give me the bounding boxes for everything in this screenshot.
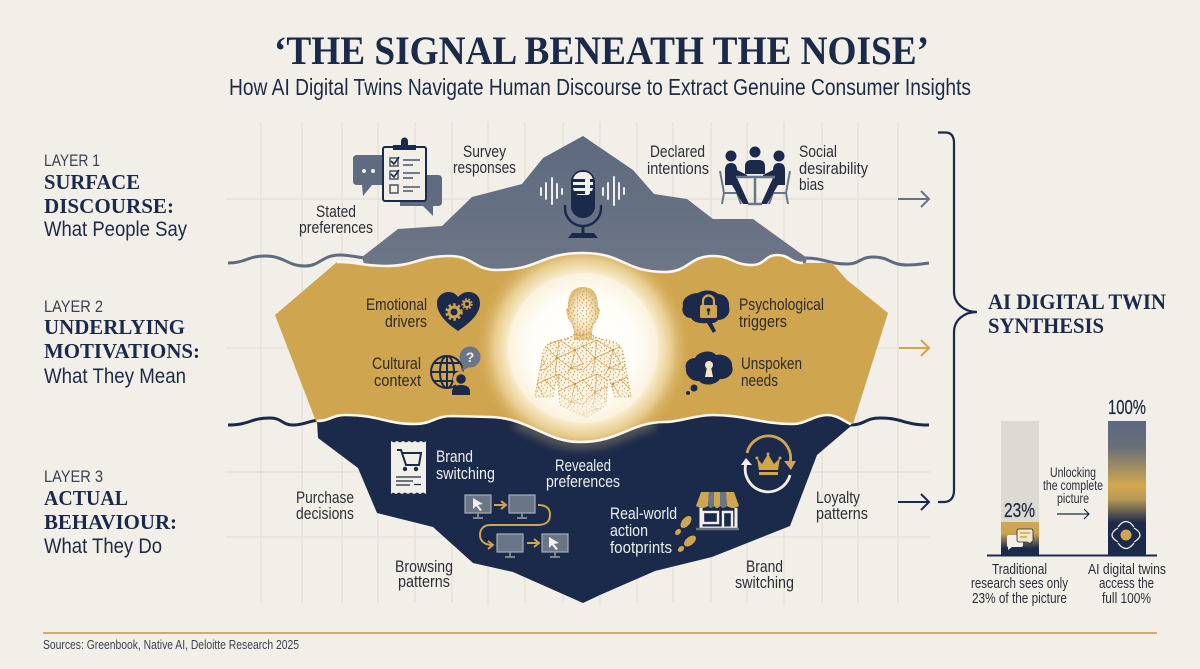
icon: thought cloud with keyhole xyxy=(686,351,733,395)
synthesis heading: AI DIGITAL TWIN xyxy=(988,289,1166,314)
motivation labels: Emotional xyxy=(366,296,427,314)
motivation labels: needs xyxy=(741,372,778,390)
layer 3 heading: BEHAVIOUR: xyxy=(44,510,177,534)
layer 3 heading xyxy=(44,467,177,558)
icon: microphone with sound waves xyxy=(541,170,624,238)
surface labels: Declared xyxy=(650,143,705,161)
icon: globe with person and question xyxy=(431,346,480,395)
motivation labels: Psychological xyxy=(739,296,824,314)
behaviour labels outside: Purchase xyxy=(296,489,354,507)
behaviour labels on navy: action xyxy=(610,522,648,540)
bar chart: traditional vs AI twins: 100% xyxy=(1108,397,1146,419)
caption: AI digital twins: access the xyxy=(1099,576,1154,592)
layer 2 heading xyxy=(44,297,200,388)
caption: AI digital twins: full 100% xyxy=(1102,591,1151,607)
surface labels: preferences xyxy=(299,219,373,237)
caption: AI digital twins: AI digital twins xyxy=(1088,562,1166,578)
behaviour labels on navy: Brand xyxy=(436,448,473,466)
icon: shopping cart receipt xyxy=(391,441,426,494)
behaviour labels outside: decisions xyxy=(296,505,354,523)
icon: people at a table xyxy=(720,146,790,204)
behaviour labels outside: Loyalty xyxy=(816,489,861,507)
behaviour labels outside: patterns xyxy=(398,573,450,591)
icon: chat bubbles xyxy=(1007,529,1033,550)
icon: brain with padlock xyxy=(682,290,729,333)
unlocking callout xyxy=(1043,464,1103,519)
behaviour labels outside: Brand xyxy=(746,558,783,576)
synthesis heading xyxy=(988,289,1166,338)
layer 3 heading: LAYER 3 xyxy=(44,467,103,486)
synthesis bracket xyxy=(938,132,977,502)
subtitle: How AI Digital Twins Navigate Human Discourse to Extract Genuine Consumer Insights xyxy=(229,74,971,100)
motivation labels: drivers xyxy=(385,313,427,331)
unlocking callout: the complete xyxy=(1043,477,1103,493)
motivation labels: Cultural xyxy=(372,355,421,373)
title: ‘THE SIGNAL BENEATH THE NOISE’ xyxy=(274,28,929,73)
motivation labels: context xyxy=(374,372,421,390)
layer 2 heading: MOTIVATIONS: xyxy=(44,339,200,363)
layer 1 heading: What People Say xyxy=(44,218,187,241)
panel: underlying motivations band xyxy=(275,254,888,441)
synthesis heading: SYNTHESIS xyxy=(988,313,1104,338)
unlocking callout: Unlocking xyxy=(1050,464,1096,480)
surface labels: desirability xyxy=(799,160,869,178)
motivation labels xyxy=(366,296,824,390)
caption: traditional research: research sees only xyxy=(971,576,1069,592)
layer 2 heading: What They Mean xyxy=(44,365,186,388)
surface labels: Social xyxy=(799,143,837,161)
surface labels: Stated xyxy=(316,203,356,221)
bar chart: traditional vs AI twins xyxy=(987,397,1157,556)
caption: traditional research: Traditional xyxy=(992,562,1047,578)
surface labels: bias xyxy=(799,176,824,194)
layer 3 heading: ACTUAL xyxy=(44,486,128,510)
behaviour labels outside: patterns xyxy=(816,505,868,523)
behaviour labels on navy: Revealed xyxy=(555,457,611,475)
surface labels xyxy=(299,143,869,237)
behaviour labels on navy: Real-world xyxy=(610,505,677,523)
behaviour labels outside: Browsing xyxy=(395,558,453,576)
arrow: surface to synthesis xyxy=(898,191,929,207)
panel: surface discourse mountain xyxy=(362,136,807,285)
surface labels: responses xyxy=(453,159,516,177)
surface labels: intentions xyxy=(647,160,709,178)
icon: heart with gears xyxy=(437,292,480,331)
icon: survey clipboard with speech bubbles xyxy=(353,138,442,216)
surface labels: Survey xyxy=(463,143,507,161)
unlocking callout: picture xyxy=(1057,490,1089,506)
caption: AI digital twins xyxy=(1088,562,1166,607)
layer 2 heading: LAYER 2 xyxy=(44,297,103,316)
layer 1 heading: LAYER 1 xyxy=(44,151,100,170)
caption: traditional research xyxy=(971,562,1069,607)
motivation labels: triggers xyxy=(739,313,787,331)
surface wave line xyxy=(228,255,929,266)
sources: Sources: Greenbook, Native AI, Deloitte Research 2025 xyxy=(43,637,299,652)
layer 1 heading: SURFACE xyxy=(44,170,140,194)
layer 1 heading xyxy=(44,151,187,241)
icon: orbit core xyxy=(1112,522,1140,548)
panel: actual behaviour base xyxy=(317,415,851,603)
caption: traditional research: 23% of the picture xyxy=(972,591,1067,607)
icon: storefront and footprints xyxy=(674,492,739,553)
human mesh figure xyxy=(535,287,631,418)
icon: globe with person and question: ? xyxy=(466,349,474,365)
motivation labels: Unspoken xyxy=(741,355,802,373)
behaviour labels outside: switching xyxy=(735,574,794,592)
behaviour labels on navy xyxy=(436,448,677,557)
icon: browsing path monitors xyxy=(465,495,568,557)
icon: loyalty crown cycle xyxy=(741,436,796,492)
layer 1 heading: DISCOURSE: xyxy=(44,194,174,218)
behaviour labels on navy: switching xyxy=(436,465,495,483)
layer 2 heading: UNDERLYING xyxy=(44,315,185,339)
arrow: behaviour to synthesis xyxy=(898,494,929,510)
behaviour wave line xyxy=(228,418,929,425)
layer 3 heading: What They Do xyxy=(44,535,162,558)
glowing disc xyxy=(508,273,658,423)
behaviour labels on navy: footprints xyxy=(610,539,672,557)
bar chart: traditional vs AI twins: 23% xyxy=(1004,500,1035,522)
wave highlights xyxy=(317,253,851,442)
behaviour labels on navy: preferences xyxy=(546,473,620,491)
behaviour labels outside xyxy=(296,489,868,592)
arrow: motivations to synthesis xyxy=(899,340,929,356)
